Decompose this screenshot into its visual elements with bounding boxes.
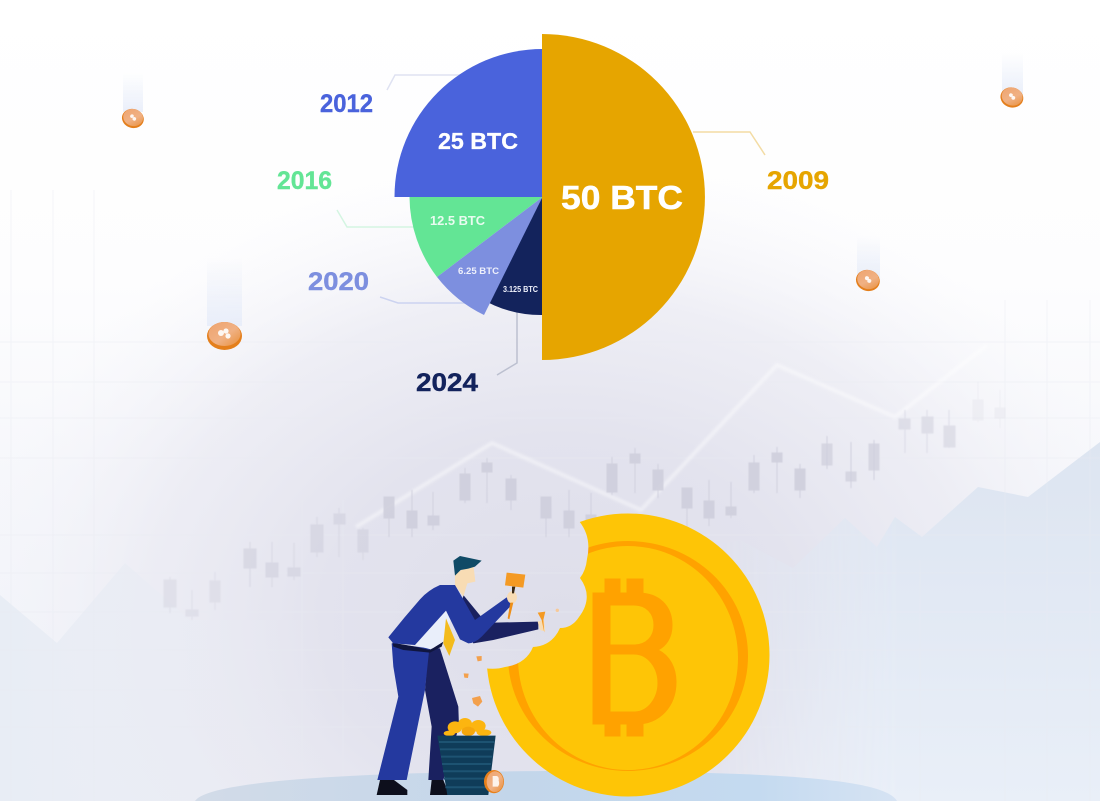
businessman mining the coin xyxy=(377,556,559,795)
year label: 2024: 2024 xyxy=(416,369,478,397)
year label: 2009: 2009 xyxy=(767,167,829,195)
slice: 2012 25 BTC xyxy=(394,49,542,197)
back shoe xyxy=(430,780,449,795)
far arm xyxy=(460,595,538,643)
chisel xyxy=(538,612,545,633)
shirt xyxy=(415,611,451,649)
slice: 2016 12.5 BTC xyxy=(410,197,542,277)
hammer head xyxy=(505,573,525,588)
hammer handle lower xyxy=(508,603,513,619)
near hand xyxy=(507,591,517,603)
bitcoin symbol xyxy=(593,579,676,736)
mountain right xyxy=(884,442,1100,764)
leader line: 2016 xyxy=(337,210,414,227)
background mountains xyxy=(0,442,1100,764)
neck and head xyxy=(455,564,475,597)
candlestick chart xyxy=(164,382,1005,620)
basket stripes xyxy=(439,742,494,787)
leader line: 2009 xyxy=(693,132,765,155)
belt xyxy=(392,642,443,653)
leader line: 2012 xyxy=(387,75,460,90)
year label: 2012: 2012 xyxy=(320,90,373,118)
coin inner ring xyxy=(508,541,748,771)
coin trail xyxy=(857,236,880,278)
falling coin: top left xyxy=(120,72,146,131)
slice: 2020 6.25 BTC xyxy=(437,197,542,315)
coin trail xyxy=(123,72,143,112)
ground ellipse xyxy=(195,771,897,801)
value: 3.125 BTC: 3.125 BTC xyxy=(503,285,538,294)
background grid xyxy=(0,190,1100,801)
falling coin: top right xyxy=(998,52,1026,110)
falling coin: large left xyxy=(207,258,242,350)
falling coin: middle right xyxy=(854,236,882,294)
far hand xyxy=(538,620,545,632)
small coin by basket xyxy=(484,770,504,793)
value: 12.5 BTC: 12.5 BTC xyxy=(430,213,486,228)
slice: 2009 50 BTC xyxy=(542,34,705,360)
rising trend line xyxy=(356,345,987,527)
coin body xyxy=(486,514,770,796)
year label: 2020: 2020 xyxy=(308,268,369,296)
gold pile xyxy=(444,718,491,736)
mining basket xyxy=(437,736,496,795)
leader line: 2024 xyxy=(497,312,517,375)
coin xyxy=(120,106,146,131)
hair xyxy=(453,556,482,576)
slice: 2024 3.125 BTC xyxy=(480,197,542,315)
value: 50 BTC: 50 BTC xyxy=(561,179,683,216)
pie chart xyxy=(394,34,705,360)
tie xyxy=(443,618,455,656)
jacket xyxy=(388,585,512,645)
coin xyxy=(207,322,242,350)
coin trail xyxy=(207,258,242,326)
year label: 2016: 2016 xyxy=(277,167,332,195)
large bitcoin with bite xyxy=(486,514,770,796)
hammer handle xyxy=(512,587,515,593)
coin debris xyxy=(464,609,559,707)
mountain left xyxy=(0,563,330,801)
coin xyxy=(998,85,1026,110)
front shoe xyxy=(377,780,407,795)
front leg xyxy=(377,643,429,780)
coin xyxy=(854,267,882,294)
leader line: 2020 xyxy=(380,297,466,303)
back leg xyxy=(425,648,459,780)
value: 6.25 BTC: 6.25 BTC xyxy=(458,266,499,277)
coin trail xyxy=(1002,52,1023,95)
value: 25 BTC: 25 BTC xyxy=(438,128,518,154)
